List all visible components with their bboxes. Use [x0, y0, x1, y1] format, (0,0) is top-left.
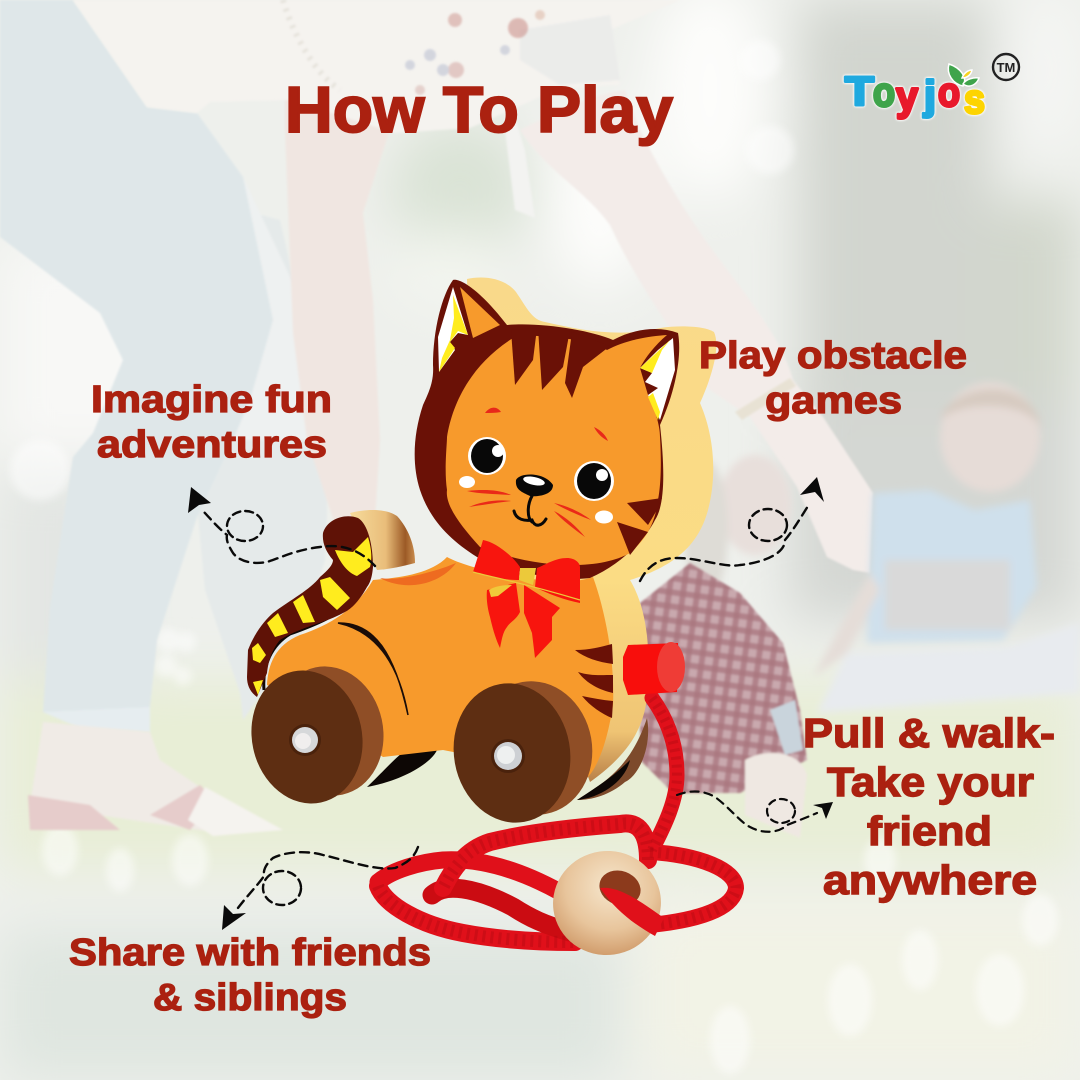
logo wordmark: T [845, 68, 874, 114]
logo wordmark: y [896, 73, 918, 119]
rope texture [378, 698, 736, 942]
caption: imagine fun adventures: Imagine fun [91, 379, 332, 421]
whiskers and cheeks [459, 476, 613, 537]
eyes [468, 437, 614, 501]
logo leaves [948, 64, 979, 86]
back wheels [367, 718, 648, 800]
red peg [623, 642, 685, 695]
forehead stripes [511, 328, 610, 398]
logo: Toyjos [845, 54, 1019, 122]
caption: imagine fun adventures: adventures [97, 424, 327, 466]
tail [247, 516, 373, 697]
skin legs and arm [285, 90, 873, 573]
caption: play obstacle games: Play obstacle [699, 335, 967, 377]
caption: share with friends and siblings: & siblings [153, 977, 347, 1019]
white blouse [73, 0, 680, 218]
red rope [378, 698, 736, 942]
orange face [446, 335, 667, 565]
tail stump [350, 510, 415, 570]
back slit [380, 563, 456, 585]
logo wordmark: o [938, 69, 960, 115]
right front wheel [443, 672, 603, 832]
trademark badge: TM [997, 60, 1015, 75]
logo wordmark: o [873, 69, 895, 115]
red bow [473, 540, 580, 658]
caption: share with friends and siblings: Share with friends [69, 932, 431, 974]
arrow: to Share with friends [222, 847, 418, 930]
blouse embroidery [405, 10, 545, 95]
right ear [640, 338, 675, 420]
side stripes [575, 644, 613, 718]
caption: pull and walk: friend [867, 808, 992, 854]
title: How To Play [285, 73, 673, 146]
cheek stripes [617, 498, 662, 555]
caption: pull and walk: Pull & walk- [803, 710, 1055, 756]
arrow: to Imagine fun adventures [188, 487, 375, 566]
cream wooden back [467, 277, 716, 782]
haunch line [338, 623, 408, 715]
orange body [267, 557, 613, 778]
caption: pull and walk: anywhere [823, 857, 1037, 903]
caption: pull and walk [803, 710, 1055, 903]
walking feet [28, 722, 283, 836]
nose and mouth [514, 475, 553, 525]
caption: imagine fun adventures [91, 379, 332, 466]
logo wordmark [845, 68, 985, 122]
caption: share with friends and siblings [69, 932, 431, 1019]
caption: play obstacle games: games [765, 380, 902, 422]
wooden bead [546, 844, 668, 962]
toy: wooden cat pull toy [239, 277, 736, 962]
jeans legs [0, 0, 330, 732]
head dark outline [415, 280, 679, 579]
caption: pull and walk: Take your [827, 759, 1034, 805]
plaid child [640, 563, 807, 838]
eyebrows [485, 408, 608, 441]
trademark badge [993, 54, 1019, 80]
seated children [684, 382, 1080, 713]
arrow: to Play obstacle games [640, 477, 824, 581]
caption: play obstacle games [699, 335, 967, 422]
arrow: to Pull and walk [677, 791, 833, 832]
left ear [438, 287, 500, 372]
logo wordmark: s [964, 76, 985, 122]
logo wordmark: j [923, 72, 936, 118]
left front wheel [239, 656, 395, 814]
